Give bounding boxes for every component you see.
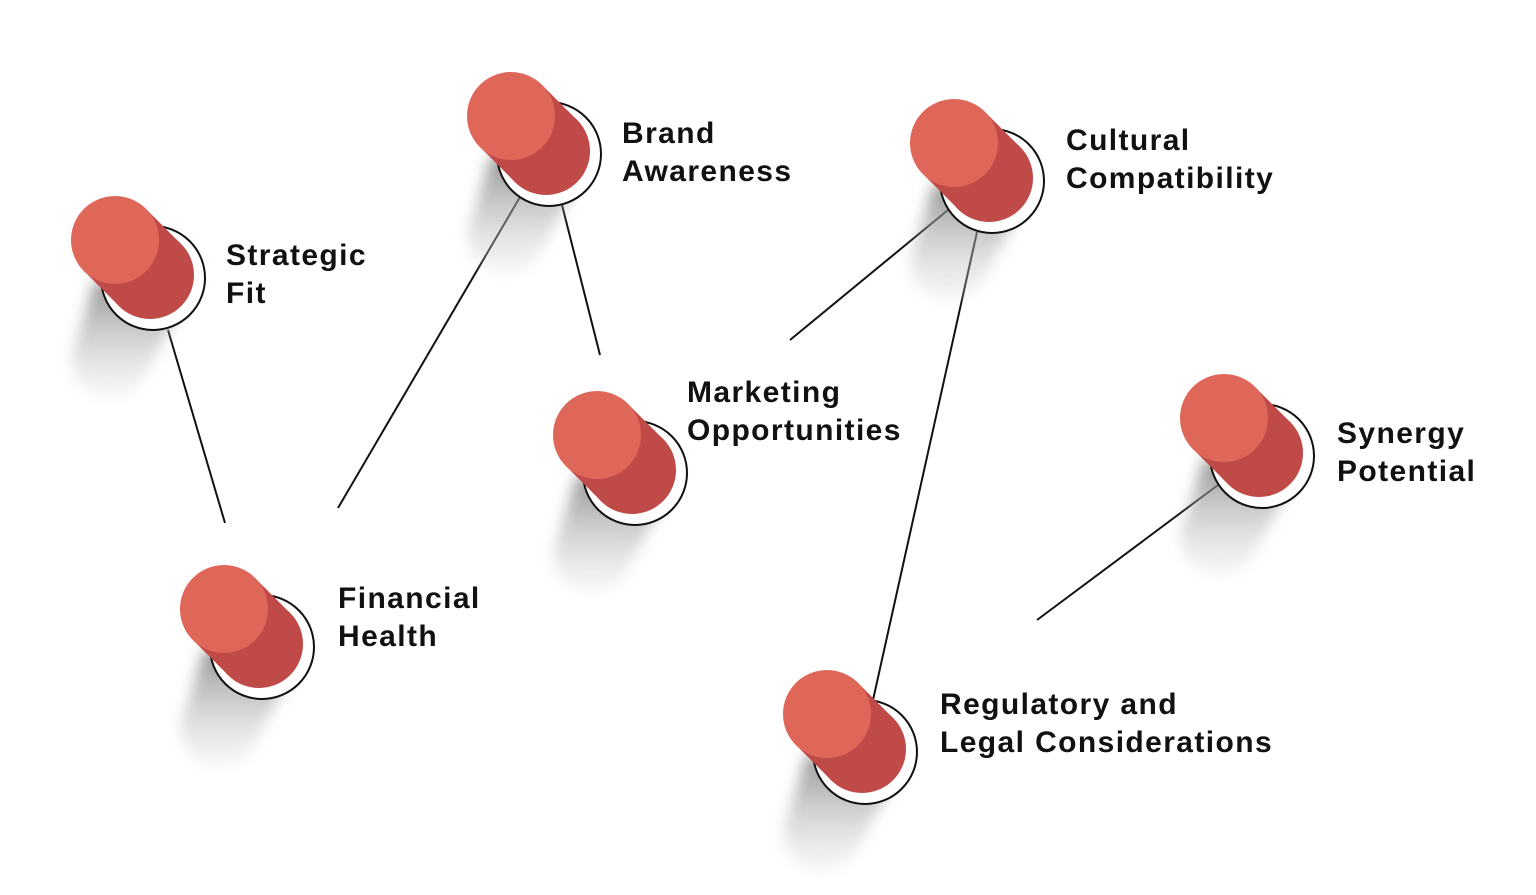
pin: brand awareness [467, 72, 601, 274]
label: cultural compatibility: Cultural [1066, 124, 1191, 157]
label: brand awareness: Brand [622, 117, 716, 150]
label: regulatory: Legal Considerations [940, 726, 1273, 759]
label: synergy potential: Potential [1337, 455, 1476, 488]
pin: marketing opportunities [553, 391, 687, 593]
label: strategic fit: Strategic [226, 239, 367, 272]
label: brand awareness: Awareness [622, 155, 792, 188]
label: strategic fit: Fit [226, 277, 267, 310]
label: regulatory: Regulatory and [940, 688, 1178, 721]
label: synergy potential: Synergy [1337, 417, 1465, 450]
label: financial health: Health [338, 620, 438, 653]
label: marketing opportunities: Marketing [687, 376, 841, 409]
pin: synergy potential [1180, 374, 1314, 576]
label: financial health: Financial [338, 582, 481, 615]
pin: strategic fit [71, 196, 205, 398]
pin: financial health [180, 565, 314, 767]
pin: regulatory [783, 670, 917, 872]
connector lines [168, 197, 1218, 700]
label: marketing opportunities: Opportunities [687, 414, 902, 447]
label: cultural compatibility: Compatibility [1066, 162, 1274, 195]
pin: cultural compatibility [910, 99, 1044, 301]
